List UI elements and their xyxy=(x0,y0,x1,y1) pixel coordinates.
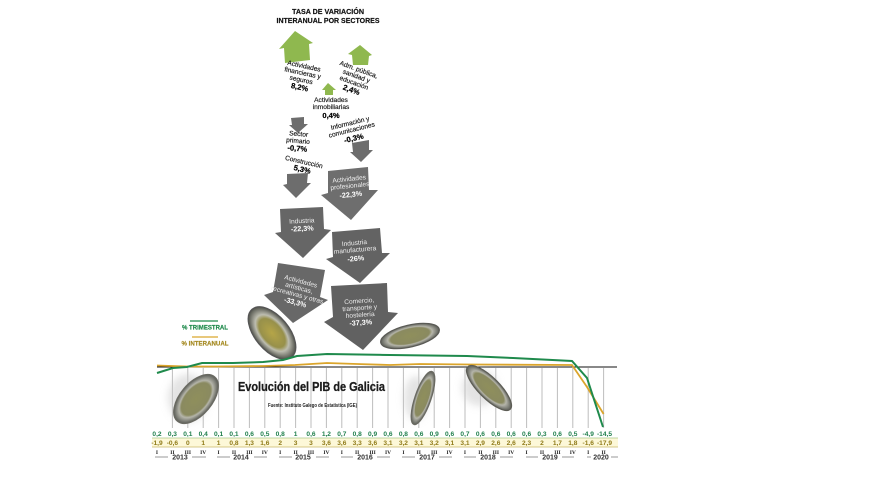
icon: green house financial activities xyxy=(279,31,313,63)
quarterly values: 0,8 xyxy=(399,431,408,438)
quarter numerals: II xyxy=(232,450,236,456)
quarter numerals: III xyxy=(185,450,191,456)
arrow: arts and recreation: Actividades xyxy=(284,274,319,290)
arrow: information and communications xyxy=(350,140,373,162)
quarterly values: 0,2 xyxy=(152,431,162,438)
year-on-year values: 1,7 xyxy=(553,440,562,447)
heading: sector rates: TASA DE VARIACIÓN xyxy=(292,7,364,16)
year-on-year values: 3,3 xyxy=(353,440,362,447)
icon: green house public administration xyxy=(348,45,372,65)
label: public administration: 2,4% xyxy=(342,83,361,97)
year-on-year values: 3,1 xyxy=(383,440,393,447)
label: financial activities: financieras y xyxy=(284,66,322,81)
quarter numerals: I xyxy=(402,450,404,456)
coin: top left xyxy=(239,298,305,368)
quarterly values: 0,8 xyxy=(353,431,362,438)
label: construction: 5,3% xyxy=(293,163,312,176)
quarterly values: 0,3 xyxy=(168,431,177,438)
year-on-year values: 3,1 xyxy=(445,440,455,447)
quarter numerals: IV xyxy=(262,450,268,456)
quarter numerals: I xyxy=(526,450,528,456)
year-on-year values: 0,8 xyxy=(229,440,239,447)
quarterly values: 0,6 xyxy=(491,431,501,438)
arrow: commerce, transport and hospitality xyxy=(324,283,398,350)
icon: green house real estate xyxy=(322,83,336,95)
quarterly values: 0,6 xyxy=(383,431,393,438)
label: public administration xyxy=(331,60,379,101)
chart title: Evolución del PIB de Galicia xyxy=(238,379,386,394)
arrow: manufacturing: -26% xyxy=(347,253,365,264)
arrow: manufacturing: manufacturera xyxy=(334,245,377,256)
quarterly values: 0,6 xyxy=(522,431,532,438)
label: construction: Construcción xyxy=(284,155,324,170)
coin: right falling xyxy=(460,359,518,417)
quarter numerals: II xyxy=(478,450,483,456)
arrow: professional activities xyxy=(321,167,378,220)
quarter numerals: II xyxy=(355,450,359,456)
quarter numerals: IV xyxy=(385,450,391,456)
quarter numerals: III xyxy=(246,450,253,456)
quarter numerals: II xyxy=(601,450,606,456)
label: construction xyxy=(282,155,324,178)
arrow: professional activities: Actividades xyxy=(332,174,367,185)
year axis: 2015 xyxy=(295,454,311,462)
year-on-year values: 2,6 xyxy=(507,440,516,447)
legend: quarterly xyxy=(182,321,228,332)
year-on-year values: 1 xyxy=(201,440,205,447)
year axis: 2017 xyxy=(419,454,435,462)
label: real estate: inmobiliarias xyxy=(313,104,350,111)
band behind interanual row xyxy=(152,438,618,447)
label: financial activities: 8,2% xyxy=(290,81,309,94)
quarter numerals: IV xyxy=(570,450,576,456)
quarter numerals: I xyxy=(587,450,589,456)
quarter numerals: I xyxy=(218,450,220,456)
label: primary sector: Sector xyxy=(289,130,309,139)
year-on-year values: 1,3 xyxy=(245,440,254,447)
label: public administration: educación xyxy=(338,75,369,92)
coin: centre falling xyxy=(404,369,440,427)
year-on-year values: 1 xyxy=(217,440,221,447)
heading: sector rates xyxy=(276,7,380,25)
label: real estate: 0,4% xyxy=(322,111,340,120)
line: year-on-year xyxy=(157,363,604,414)
quarterly values: 0,8 xyxy=(276,431,285,438)
label: real estate xyxy=(313,97,350,120)
year axis: 2019 xyxy=(542,454,558,462)
quarter numerals: IV xyxy=(323,450,329,456)
year-on-year values: 0 xyxy=(186,440,190,447)
year-on-year values: 2,6 xyxy=(491,440,501,447)
label: information and communications: comunicaciones xyxy=(328,121,376,140)
label: real estate: Actividades xyxy=(314,97,349,104)
quarterly values xyxy=(152,431,612,438)
quarterly values: 1,2 xyxy=(322,431,331,438)
arrow: primary sector xyxy=(289,117,308,133)
year-on-year values: 3,6 xyxy=(322,440,331,447)
year-on-year values: 3,1 xyxy=(460,440,470,447)
source: Fuente: Instituto Galego de Estatística (IGE) xyxy=(268,403,357,409)
arrow: professional activities: -22,3% xyxy=(339,189,363,200)
label: public administration: sanidad y xyxy=(342,69,371,85)
quarter numerals: III xyxy=(554,450,561,456)
year axis: 2016 xyxy=(357,454,373,462)
arrow: manufacturing xyxy=(326,228,390,283)
year axis: 2014 xyxy=(233,454,249,462)
label: primary sector xyxy=(285,130,311,154)
quarterly values: 0,9 xyxy=(368,431,378,438)
quarterly values: 0,5 xyxy=(260,431,270,438)
arrow: professional activities: profesionales xyxy=(330,181,371,192)
line: quarterly xyxy=(157,354,603,427)
quarter numerals: III xyxy=(308,450,314,456)
quarterly values: 0,7 xyxy=(460,431,470,438)
year-on-year values: 3,2 xyxy=(399,440,408,447)
quarterly values: -4,9 xyxy=(583,431,594,438)
quarter numerals: IV xyxy=(508,450,514,456)
quarterly values: 0,6 xyxy=(476,431,485,438)
year-on-year values: 1,8 xyxy=(568,440,578,447)
quarterly values: 0,4 xyxy=(199,431,208,438)
coin: top right xyxy=(378,319,442,353)
quarterly values: 0,9 xyxy=(430,431,439,438)
quarterly values: -14,5 xyxy=(597,431,612,438)
quarter numerals: IV xyxy=(447,450,453,456)
arrow: industry: Industria xyxy=(289,217,315,226)
quarterly values: 0,6 xyxy=(414,431,424,438)
arrow: industry: -22,3% xyxy=(291,223,314,234)
legend: quarterly: % TRIMESTRAL xyxy=(182,324,228,332)
quarter numerals: II xyxy=(540,450,544,456)
year-on-year values: 3,6 xyxy=(337,440,347,447)
arrow: commerce, transport and hospitality: -37,3% xyxy=(349,317,373,328)
year axis: 2020 xyxy=(593,454,609,462)
legend: year-on-year: % INTERANUAL xyxy=(182,340,229,348)
arrow: construction xyxy=(283,173,311,198)
year axis xyxy=(155,454,618,462)
quarterly values: 0,6 xyxy=(553,431,562,438)
quarter numerals: IV xyxy=(200,450,206,456)
label: financial activities: Actividades xyxy=(287,60,322,74)
quarterly values: 0,5 xyxy=(568,431,578,438)
quarter numerals xyxy=(156,450,606,456)
quarter numerals: III xyxy=(369,450,376,456)
year-on-year values xyxy=(151,440,612,447)
year axis: 2013 xyxy=(172,454,188,462)
year-on-year values: -17,9 xyxy=(597,440,612,447)
quarter numerals: I xyxy=(464,450,466,456)
quarter numerals: III xyxy=(493,450,499,456)
coin: lower left xyxy=(165,367,227,431)
arrow: commerce, transport and hospitality: hostelería xyxy=(346,311,375,320)
arrow: arts and recreation: recreativas y otras xyxy=(270,285,325,306)
year-on-year values: -0,6 xyxy=(167,440,178,447)
quarter numerals: II xyxy=(417,450,421,456)
label: primary sector: primario xyxy=(286,137,310,146)
label: financial activities xyxy=(281,59,323,96)
zero baseline xyxy=(157,366,617,368)
year-on-year values: 3,1 xyxy=(414,440,424,447)
year-on-year values: 3,6 xyxy=(368,440,378,447)
quarterly values: 0,1 xyxy=(214,431,224,438)
quarterly values: 0,6 xyxy=(245,431,254,438)
label: public administration: Adm. pública, xyxy=(339,60,379,80)
year-on-year values: -1,9 xyxy=(151,440,163,447)
year-on-year values: 3 xyxy=(294,440,298,447)
quarter numerals: III xyxy=(431,450,437,456)
year-on-year values: 3,2 xyxy=(430,440,439,447)
quarterly values: 1 xyxy=(294,431,298,438)
quarterly values: 0,3 xyxy=(537,431,547,438)
quarter numerals: II xyxy=(293,450,298,456)
quarter numerals: I xyxy=(156,450,158,456)
arrow: commerce, transport and hospitality: Comercio, xyxy=(344,297,375,306)
quarterly values: 0,1 xyxy=(229,431,239,438)
grey vertical gridlines xyxy=(172,368,604,428)
arrow: industry xyxy=(275,207,331,258)
arrow: manufacturing: Industria xyxy=(342,239,368,248)
quarter numerals: I xyxy=(279,450,281,456)
arrow: commerce, transport and hospitality: transporte y xyxy=(342,304,378,313)
label: information and communications: -0,3% xyxy=(343,131,365,145)
arrow: arts and recreation: artísticas, xyxy=(284,282,314,296)
year-on-year values: -1,6 xyxy=(583,440,594,447)
label: information and communications: Información y xyxy=(330,115,371,132)
year-on-year values: 2,9 xyxy=(476,440,485,447)
year-on-year values: 2 xyxy=(278,440,282,447)
year-on-year values: 3 xyxy=(309,440,313,447)
label: financial activities: seguros xyxy=(289,75,314,86)
quarterly values: 0,6 xyxy=(507,431,516,438)
quarterly values: 0,6 xyxy=(306,431,316,438)
quarterly values: 0,6 xyxy=(445,431,455,438)
arrow: arts and recreation xyxy=(264,263,328,323)
heading: sector rates: INTERANUAL POR SECTORES xyxy=(276,16,380,25)
year-on-year values: 1,6 xyxy=(260,440,270,447)
label: primary sector: -0,7% xyxy=(287,143,308,154)
quarterly values: 0,1 xyxy=(183,431,193,438)
year-on-year values: 2 xyxy=(540,440,544,447)
quarterly values: 0,7 xyxy=(337,431,347,438)
label: information and communications xyxy=(326,114,379,148)
quarter numerals: II xyxy=(170,450,175,456)
year-on-year values: 2,3 xyxy=(522,440,532,447)
legend: year-on-year xyxy=(182,337,229,348)
year axis: 2018 xyxy=(480,454,496,462)
arrow: arts and recreation: -33,3% xyxy=(283,295,308,310)
quarter numerals: I xyxy=(341,450,343,456)
